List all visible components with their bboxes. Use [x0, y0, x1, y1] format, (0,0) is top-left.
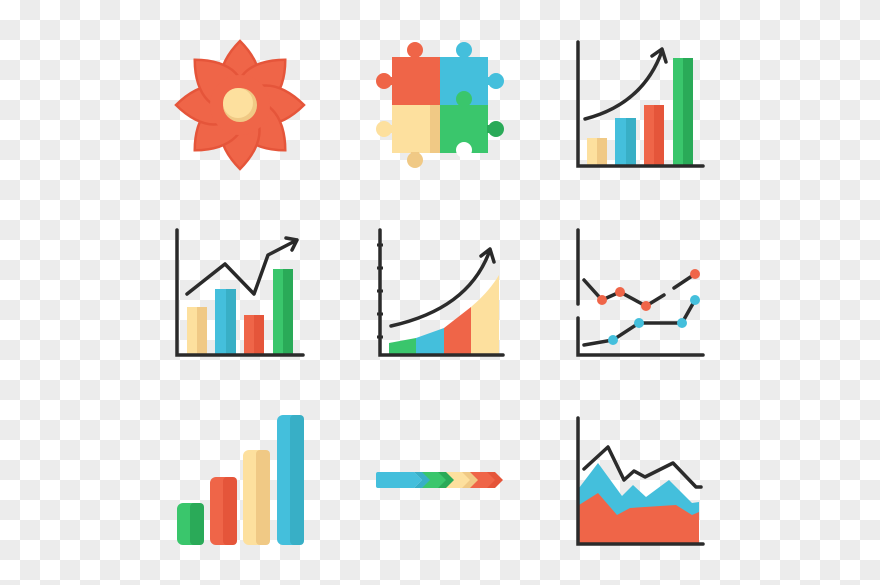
chart: stacked area [578, 418, 703, 544]
chart: cylinders [177, 415, 304, 545]
chart: dot line chart [578, 230, 703, 355]
chart: bars with zigzag line [177, 230, 303, 355]
chart: growth area with arrow [377, 230, 503, 355]
icon: chevron progress bar [376, 472, 503, 488]
chart: bar with rising arrow [578, 42, 703, 166]
icon: puzzle [376, 42, 504, 168]
icon: flower [176, 41, 304, 169]
